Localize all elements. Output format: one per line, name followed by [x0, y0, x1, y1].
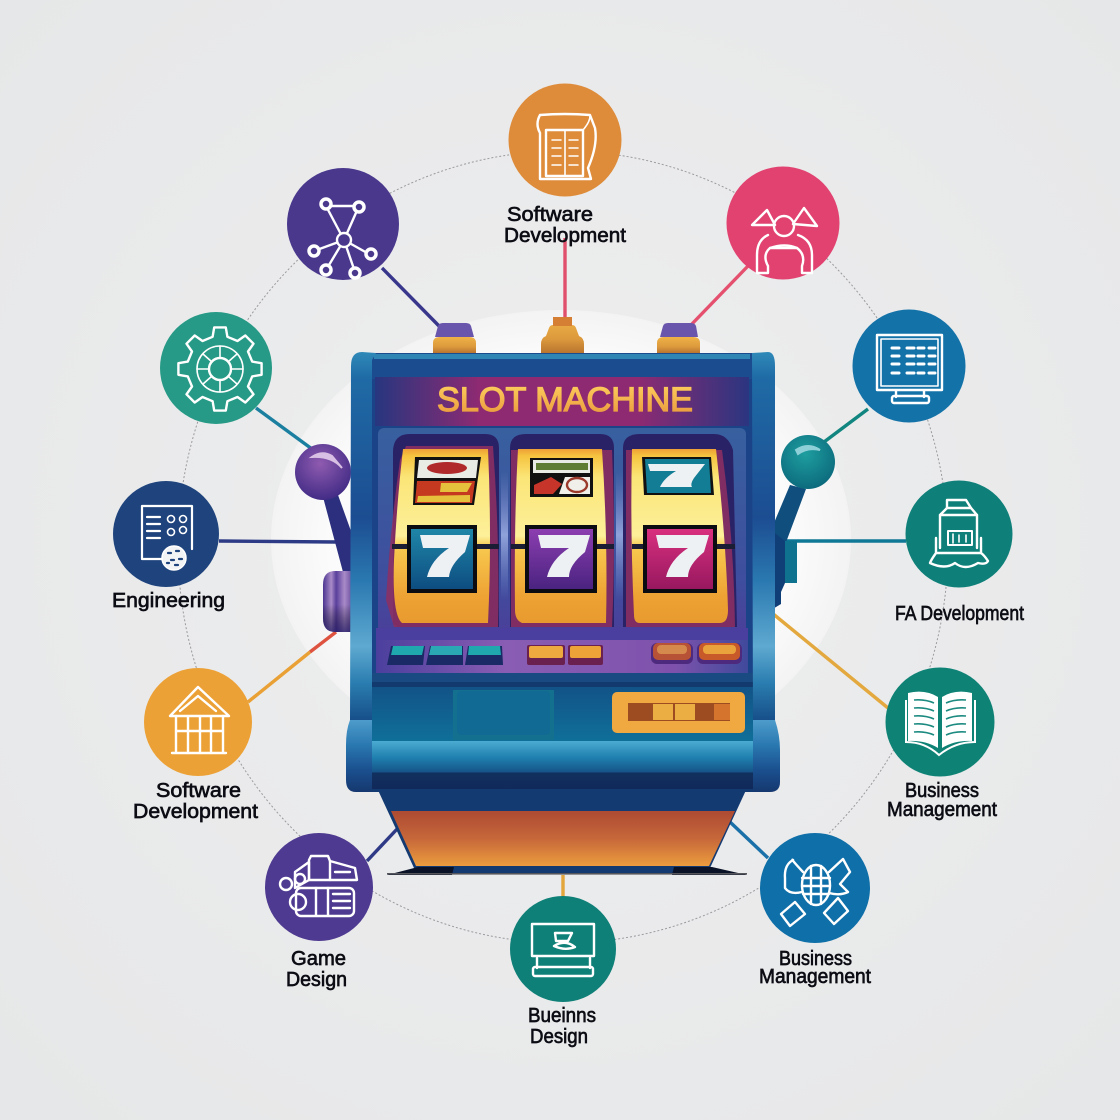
label: business management right — [887, 780, 997, 821]
white halo behind machine — [271, 310, 851, 770]
node: pink robot — [726, 166, 840, 280]
label: business management bottom: Business — [779, 948, 852, 970]
front rail — [372, 741, 755, 789]
label: software development top: Development — [504, 225, 626, 247]
icon: globe and cards — [781, 859, 850, 926]
label: business management bottom — [759, 948, 871, 988]
node: network — [287, 168, 399, 280]
label: business management right: Business — [905, 780, 979, 802]
node: building — [144, 668, 252, 776]
coin slot — [612, 692, 745, 733]
label: software development left: Development — [133, 801, 258, 823]
button panel — [376, 628, 748, 674]
node: open book — [886, 668, 994, 776]
reel 3 — [623, 434, 737, 627]
cabinet body — [370, 353, 755, 743]
icon: robot figure — [752, 208, 817, 273]
label: bottom design: Design — [530, 1026, 588, 1048]
left lever — [295, 444, 356, 632]
node: globe — [760, 833, 870, 943]
reel panel — [378, 428, 746, 644]
node: engineering — [113, 481, 219, 587]
label: business management right: Management — [887, 799, 997, 821]
right pillar — [752, 352, 780, 792]
left pillar — [346, 352, 376, 792]
cabinet base — [377, 788, 747, 875]
marquee title: SLOT MACHINE — [437, 381, 693, 419]
slot machine — [295, 317, 835, 875]
icon: monitor grid — [877, 335, 942, 403]
right lever — [771, 435, 835, 610]
label: game design — [286, 948, 347, 991]
node: game design — [265, 833, 373, 941]
label: bottom design — [528, 1005, 596, 1048]
icon: open book — [906, 692, 975, 755]
connector lines — [219, 238, 906, 897]
node: FA development — [906, 480, 1012, 588]
marquee — [375, 377, 749, 426]
teal buttons — [387, 646, 503, 665]
dotted orbit ring — [178, 151, 948, 943]
icon: game hardware — [280, 856, 357, 916]
icon: ledger — [538, 114, 596, 179]
top lid — [372, 353, 752, 379]
node: top software development — [508, 84, 622, 196]
red buttons — [651, 643, 742, 664]
label: software development left — [133, 780, 258, 823]
label: business management bottom: Management — [759, 966, 871, 988]
label: engineering: Engineering — [112, 590, 225, 612]
top knobs — [433, 317, 700, 353]
icon: building — [170, 687, 229, 753]
label: software development top: Software — [507, 204, 593, 226]
node: gear — [160, 312, 272, 424]
orange buttons — [527, 645, 603, 665]
icon: gear — [178, 327, 262, 411]
label: bottom design: Bueinns — [528, 1005, 596, 1027]
node: monitor — [852, 310, 966, 422]
icon: laptop — [532, 924, 594, 976]
label: game design: Design — [286, 969, 347, 991]
icon: machine — [930, 500, 988, 567]
label: software development top — [504, 204, 626, 247]
lower panel — [372, 673, 753, 742]
icon: screen with cookie — [142, 506, 192, 570]
reel 2 — [510, 434, 614, 627]
label: game design: Game — [291, 948, 346, 970]
label: software development left: Software — [156, 780, 241, 802]
icon: network graph — [309, 199, 376, 278]
reel 1 — [386, 434, 499, 627]
node: bottom teal — [510, 896, 616, 1002]
label: FA development: FA Development — [895, 603, 1024, 625]
